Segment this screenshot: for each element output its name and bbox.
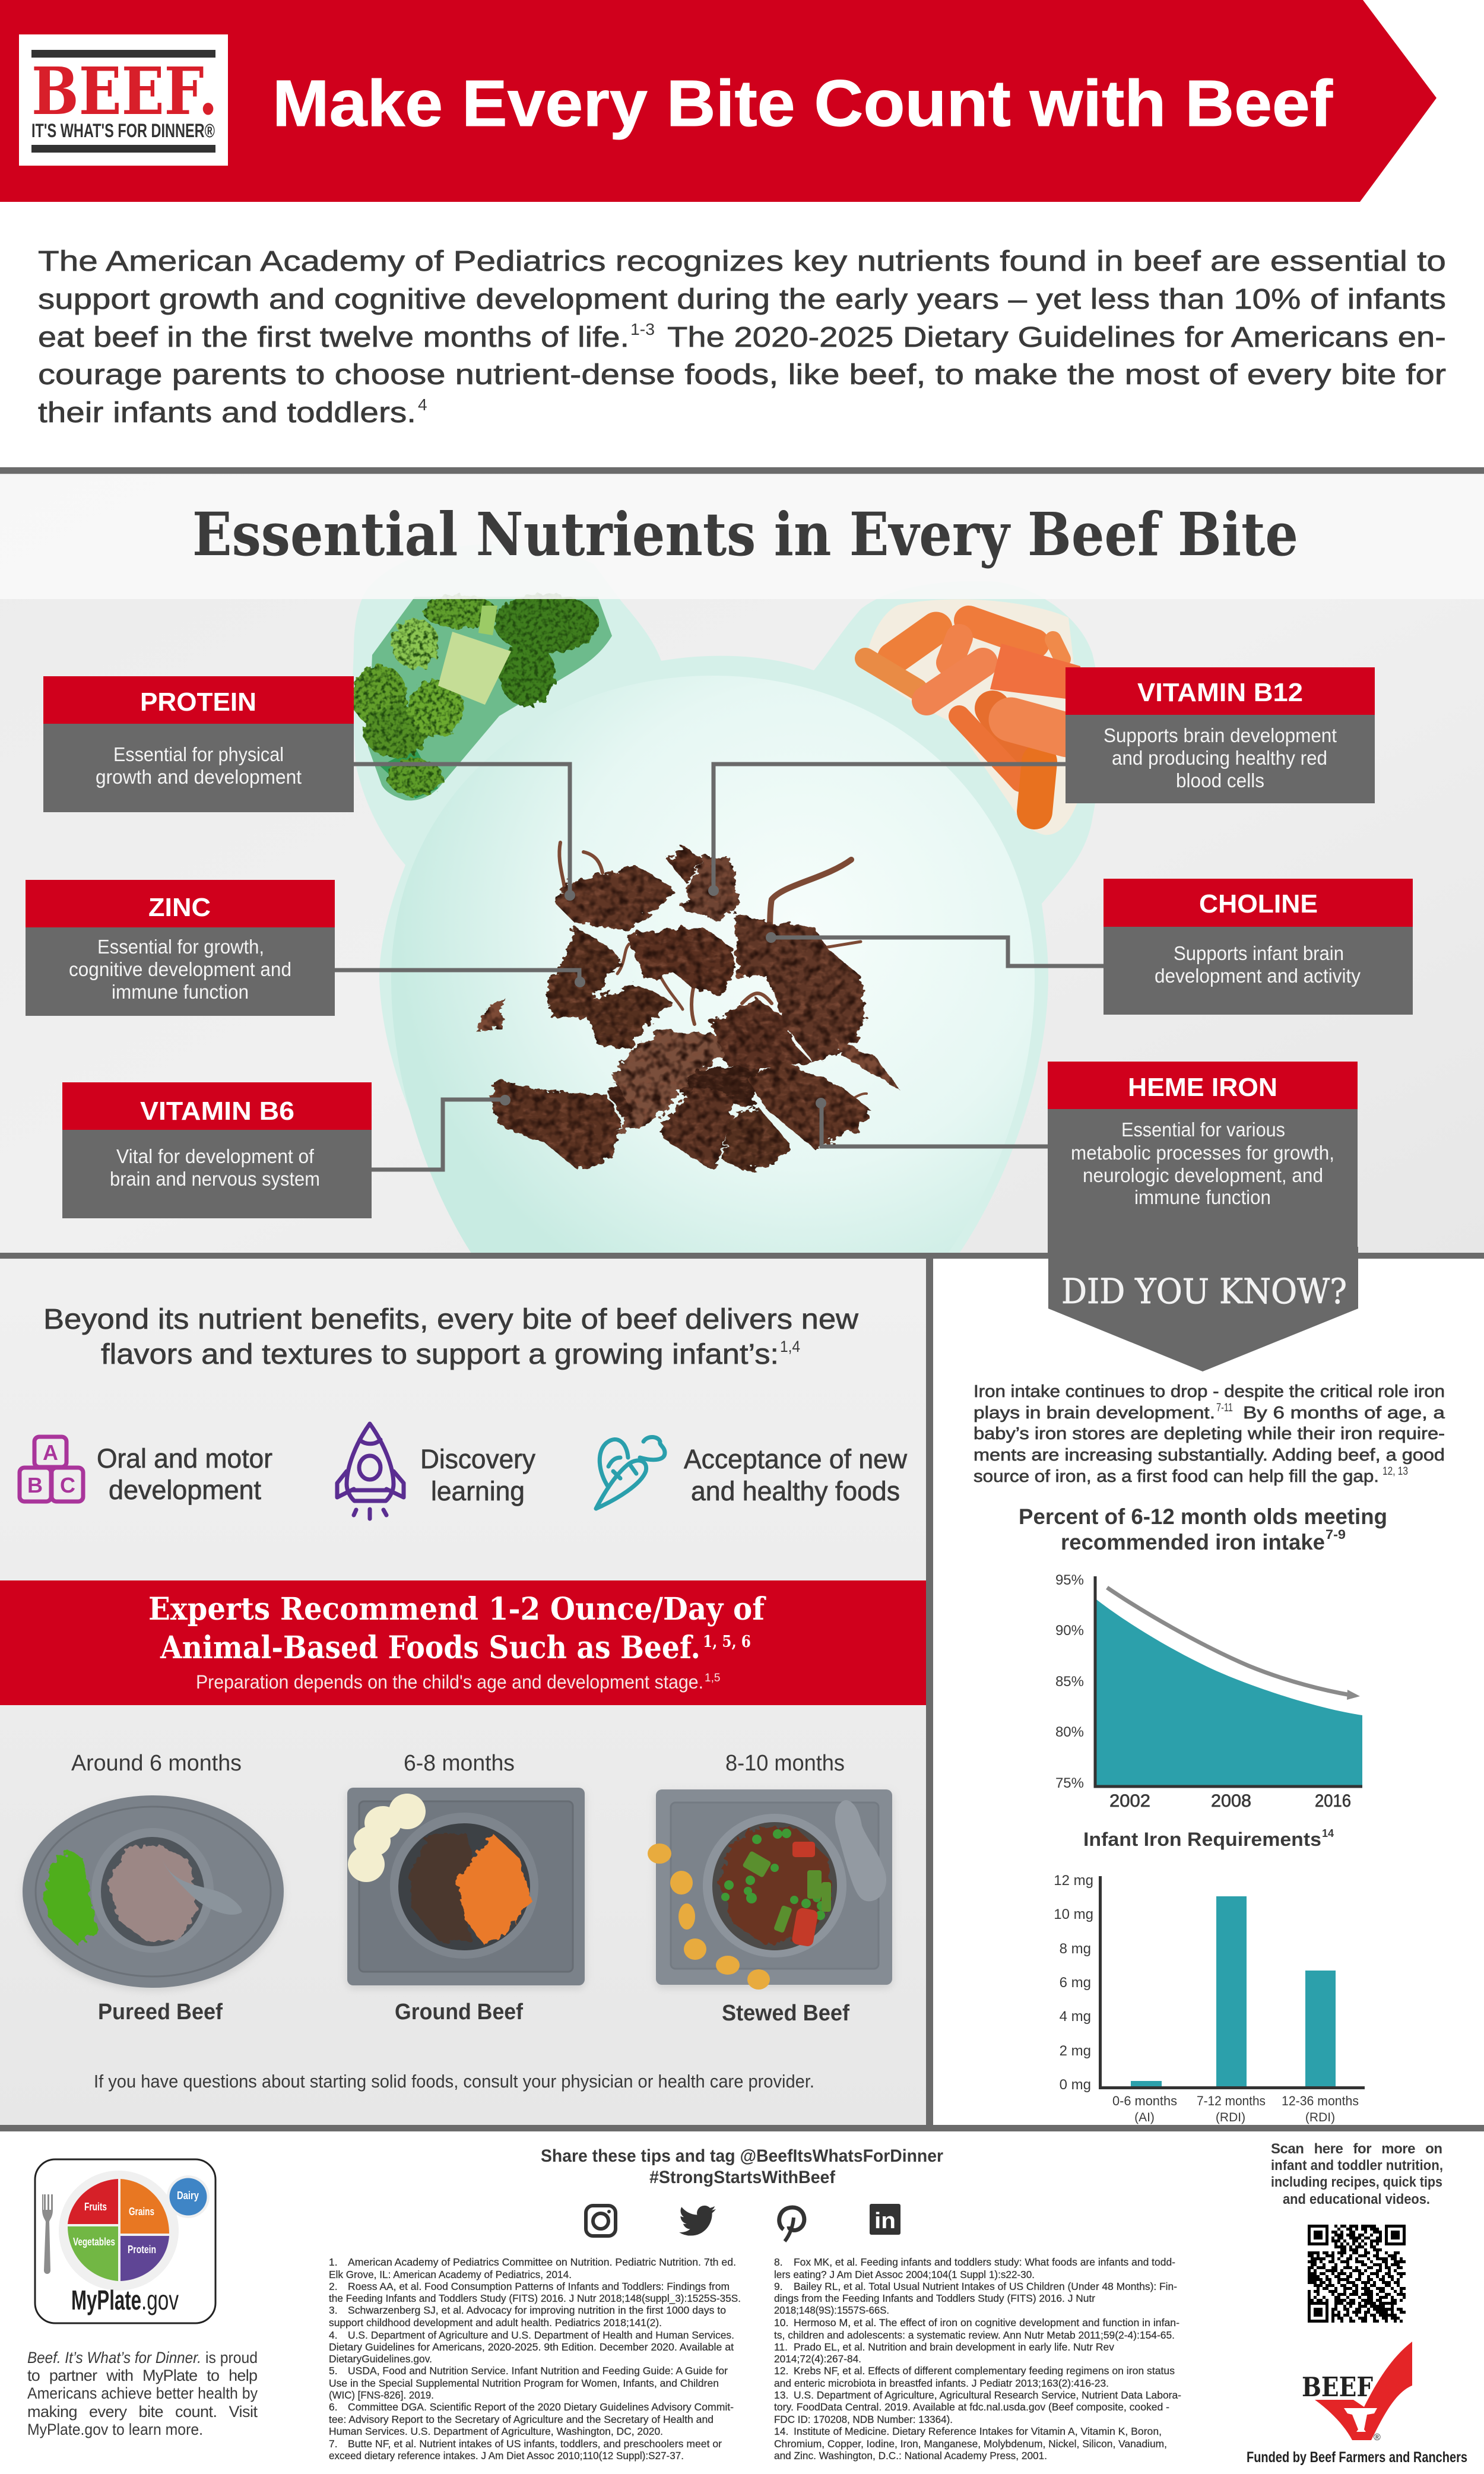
callout: protein: Essential for physical: [113, 743, 284, 765]
text: discovery learning: learning: [431, 1476, 525, 1506]
references: column 1: support childhood development and adult health. Pediatrics 2018;141(2).: [329, 2317, 662, 2329]
qr code: [1308, 2225, 1406, 2323]
references: column 2: dings from the Feeding Infants and Toddlers Study (FITS) 2016. J Nutr: [774, 2292, 1095, 2304]
chart: infant iron requirements bars: 0-6 months: [1112, 2093, 1177, 2108]
references: column 2: 9.: [774, 2280, 783, 2292]
preparation labels: Pureed Beef: [98, 2000, 223, 2025]
banner: did you know: DID YOU KNOW?: [1061, 1271, 1347, 1312]
arrow: downward trend: [1107, 1588, 1360, 1700]
callout: vitamin b6: Vital for development of: [116, 1145, 315, 1167]
intro paragraph: eat beef in the first twelve months of life.: [38, 322, 629, 353]
references: column 2: U.S. Department of Agriculture, Agricultural Research Service, Nutrient Data Labora-: [794, 2389, 1181, 2401]
references: column 2: Prado EL, et al. Nutrition and brain development in early life. Nutr Rev: [794, 2341, 1114, 2353]
references: column 1: Use in the Special Supplemental Nutrition Program for Women, Infants, and Children: [329, 2377, 719, 2389]
chart: infant iron requirements bars: 12-36 months: [1282, 2093, 1359, 2108]
chart: infant iron requirements bars: 0 mg: [1060, 2077, 1091, 2093]
references: column 1: 6.: [329, 2401, 338, 2413]
text: scan here: and educational videos.: [1283, 2191, 1430, 2207]
chart: infant iron requirements bars: (AI): [1134, 2111, 1155, 2124]
text: myplate partnership: Americans achieve better health by: [27, 2384, 258, 2402]
heading: infant iron requirements: Infant Iron Requirements: [1083, 1829, 1321, 1850]
banner: experts recommend: Experts Recommend 1-2 Ounce/Day of: [148, 1591, 766, 1627]
references: column 2: ts, children and adolescents: a systematic review. Ann Nutr Metab 2011;59(2-4):154-65.: [774, 2329, 1175, 2341]
logo: myplate: Dairy: [177, 2190, 199, 2201]
logo: Beef. It's What's for Dinner: BEEF.: [31, 53, 218, 129]
references: column 1: 7.: [329, 2438, 338, 2450]
references: column 2: Institute of Medicine. Dietary Reference Intakes for Vitamin A, Vitamin K, Boron,: [794, 2425, 1162, 2437]
chart: iron intake area chart: 2016: [1315, 1791, 1351, 1811]
logo: Beef. It's What's for Dinner: IT'S WHAT'S FOR DINNER®: [31, 120, 215, 141]
references: column 1: Human Services. U.S. Department of Agriculture, Washington, DC, 2020.: [329, 2425, 663, 2437]
photo: pureed beef plate: [23, 1795, 284, 1990]
text: myplate partnership: MyPlate.gov to learn more.: [27, 2421, 203, 2438]
chart: iron intake area chart: 90%: [1055, 1623, 1084, 1639]
preparation labels: Ground Beef: [395, 2000, 523, 2025]
text: iron intake paragraph: 12, 13: [1382, 1465, 1408, 1478]
callout: heme iron: neurologic development, and: [1083, 1164, 1323, 1186]
references: column 1: DietaryGuidelines.gov.: [329, 2353, 432, 2365]
references: column 1: Schwarzenberg SJ, et al. Advocacy for improving nutrition in the first 1000 days to: [348, 2304, 726, 2316]
text: beyond nutrient benefits: [43, 1304, 858, 1370]
callout: vitamin b6: brain and nervous system: [110, 1168, 320, 1190]
references: column 2: 10.: [774, 2317, 788, 2329]
photo: baby plate: [351, 544, 1101, 1259]
references: column 2: tory. FoodData Central. 2019. Available at fdc.nal.usda.gov (Beef composite, cooked -: [774, 2401, 1169, 2413]
text: myplate partnership: Beef. It’s What’s for Dinner.: [27, 2349, 201, 2367]
chart: infant iron requirements bars: 6 mg: [1060, 1975, 1091, 1991]
text: iron intake paragraph: 7-11: [1216, 1402, 1233, 1414]
chart: iron intake area chart: 2008: [1211, 1791, 1251, 1811]
references: column 1: 2.: [329, 2280, 338, 2292]
connector lines: [335, 764, 1104, 1170]
references: column 2: 12.: [774, 2365, 788, 2377]
logo: myplate: [35, 2159, 215, 2323]
text: discovery learning: Discovery: [420, 1444, 535, 1474]
logo: myplate: Fruits: [84, 2201, 107, 2213]
text: iron intake paragraph: By 6 months of age, a: [1243, 1404, 1445, 1423]
age labels: Around 6 months: [71, 1751, 242, 1776]
chart: infant iron requirements bars: 4 mg: [1060, 2009, 1091, 2025]
text: iron intake paragraph: Iron intake continues to drop - despite the critical role iron: [974, 1382, 1445, 1401]
icon: linkedin: [870, 2204, 900, 2235]
photo: stewed beef tray: [648, 1789, 892, 1990]
preparation labels: [98, 2000, 849, 2026]
text: myplate partnership: making every bite count. Visit: [27, 2403, 258, 2421]
heading: essential nutrients: Essential Nutrients in Every Beef Bite: [192, 499, 1298, 569]
logo: myplate: .gov: [141, 2285, 179, 2315]
references: column 1: tee: Advisory Report to the Secretary of Agriculture and the Secretary of Health and: [329, 2413, 714, 2425]
chart: infant iron requirements bars: (RDI): [1305, 2111, 1335, 2124]
chart: iron intake area chart: [1055, 1572, 1362, 1811]
text: iron intake paragraph: plays in brain development.: [974, 1404, 1215, 1423]
text: iron intake paragraph: baby’s iron stores are depleting while their iron require-: [974, 1424, 1445, 1443]
green bowl with broccoli: [351, 594, 612, 800]
text: iron intake paragraph: source of iron, as a first food can help fill the gap.: [974, 1467, 1379, 1486]
callout: choline: CHOLINE: [1199, 889, 1318, 918]
logo: beef check: BEEF: [1302, 2371, 1373, 2403]
age labels: 6-8 months: [404, 1751, 515, 1776]
heading: infant iron requirements: 14: [1322, 1827, 1334, 1839]
references: column 1: U.S. Department of Agriculture and U.S. Department of Health and Human Services.: [348, 2329, 734, 2341]
intro paragraph: their infants and toddlers.: [38, 397, 416, 429]
intro paragraph: support growth and cognitive development during the early years – yet less than 10% of infants: [38, 284, 1446, 315]
banner: experts recommend: Preparation depends on the child's age and development stage.: [196, 1671, 703, 1693]
references: column 1: 1.: [329, 2256, 338, 2268]
text: iron intake paragraph: [974, 1382, 1445, 1486]
references: column 2: Fox MK, et al. Feeding infants and toddlers study: What foods are infants and todd-: [794, 2256, 1175, 2268]
references: column 2: and enteric microbiota in breastfed infants. J Pediatr 2013;163(2):416-23.: [774, 2377, 1109, 2389]
banner: did you know: [1048, 1247, 1358, 1371]
callout: protein: PROTEIN: [140, 688, 256, 717]
references: column 1: [329, 2256, 741, 2462]
callout: heme iron: Essential for various: [1121, 1119, 1285, 1141]
chart: infant iron requirements bars: 7-12 months: [1197, 2093, 1266, 2108]
text: iron intake paragraph: ments are increasing substantially. Adding beef, a good: [974, 1446, 1445, 1465]
callout: vitamin b6: VITAMIN B6: [140, 1097, 294, 1126]
icon: pinterest: [779, 2207, 804, 2241]
text: acceptance of new and healthy foods: Acceptance of new: [684, 1444, 907, 1474]
text: myplate partnership: to partner with MyPlate to help: [27, 2367, 258, 2384]
text: beyond nutrient benefits: Beyond its nutrient benefits, every bite of beef delivers new: [43, 1304, 858, 1335]
callout: zinc: [26, 880, 335, 1016]
references: column 2: Chromium, Copper, Iodine, Iron, Manganese, Molybdenum, Nickel, Silicon, Vanadium,: [774, 2438, 1167, 2450]
callout: vitamin b12: [1066, 667, 1375, 803]
panel: essential nutrients: [0, 474, 1484, 1259]
references: column 1: 4.: [329, 2329, 338, 2341]
text: scan here: including recipes, quick tips: [1271, 2174, 1442, 2190]
callout: choline: development and activity: [1155, 965, 1361, 987]
preparation labels: Stewed Beef: [722, 2001, 849, 2026]
references: column 1: Dietary Guidelines for Americans, 2020-2025. 9th Edition. December 2020. Available at: [329, 2341, 734, 2353]
banner: experts recommend: [0, 1580, 926, 1705]
chart: iron intake area chart: 80%: [1055, 1724, 1084, 1740]
icon: abc blocks: A: [43, 1440, 58, 1465]
logo: beef check: ®: [1374, 2432, 1381, 2443]
icon: abc blocks: [20, 1437, 83, 1501]
text: oral and motor development: [97, 1443, 272, 1505]
references: column 1: American Academy of Pediatrics Committee on Nutrition. Pediatric Nutrition. 7th ed.: [348, 2256, 736, 2268]
callout: vitamin b12: VITAMIN B12: [1137, 678, 1303, 707]
logo: myplate: Protein: [128, 2244, 156, 2256]
text: acceptance of new and healthy foods: and healthy foods: [691, 1476, 900, 1506]
banner: experts recommend: 1, 5, 6: [703, 1633, 751, 1651]
text: share these tips: Share these tips and tag @BeefItsWhatsForDinner: [541, 2146, 943, 2166]
text: discovery learning: [420, 1444, 535, 1506]
references: column 1: Elk Grove, IL: American Academy of Pediatrics, 2014.: [329, 2269, 572, 2280]
references: column 2: 11.: [774, 2341, 788, 2353]
title: Make Every Bite Count with Beef: [272, 67, 1333, 140]
callout: zinc: cognitive development and: [69, 958, 291, 980]
references: column 1: USDA, Food and Nutrition Service. Infant Nutrition and Feeding Guide: A Guide for: [348, 2365, 728, 2377]
chart: infant iron requirements bars: 10 mg: [1054, 1906, 1093, 1922]
callout: heme iron: HEME IRON: [1128, 1073, 1277, 1102]
text: share these tips: #StrongStartsWithBeef: [649, 2168, 836, 2187]
icon: abc blocks: C: [60, 1473, 75, 1497]
heading: percent meeting iron intake: Percent of 6-12 month olds meeting: [1019, 1504, 1387, 1529]
panel: beyond nutrients: [0, 1259, 926, 2125]
callout: protein: growth and development: [96, 766, 302, 788]
callout: choline: Supports infant brain: [1174, 942, 1344, 964]
icon: linkedin: in: [874, 2209, 896, 2234]
header banner: [0, 0, 1437, 202]
chart: iron intake area chart: 85%: [1055, 1674, 1084, 1690]
heading: percent meeting iron intake: recommended iron intake: [1061, 1530, 1325, 1554]
icon: instagram: [586, 2206, 616, 2236]
references: column 2: Hermoso M, et al. The effect of iron on cognitive development and function in infan-: [794, 2317, 1179, 2329]
callout: vitamin b6: [62, 1082, 372, 1218]
references: column 2: 2018;148(9S):1557S-66S.: [774, 2304, 889, 2316]
callout: protein: [43, 676, 354, 812]
callout: heme iron: [1048, 1062, 1358, 1255]
chart: iron intake area chart: 75%: [1055, 1775, 1084, 1791]
age labels: [71, 1751, 845, 1776]
callout: zinc: immune function: [112, 981, 249, 1003]
banner: experts recommend: 1,5: [705, 1672, 720, 1684]
text: scan here: Scan here for more on: [1271, 2141, 1442, 2157]
references: column 2: Krebs NF, et al. Effects of different complementary feeding regimens on iron status: [794, 2365, 1175, 2377]
references: column 1: the Feeding Infants and Toddlers Study (FITS) 2016. J Nutr 2018;148(suppl_3):1525S-35S.: [329, 2292, 741, 2305]
references: column 1: Committee DGA. Scientific Report of the 2020 Dietary Guidelines Advisory Commit-: [348, 2401, 734, 2413]
callout: vitamin b12: Supports brain development: [1104, 724, 1337, 746]
intro paragraph: The 2020-2025 Dietary Guidelines for Americans en-: [667, 322, 1446, 353]
heading: percent meeting iron intake: [1019, 1504, 1387, 1554]
references: column 2: Bailey RL, et al. Total Usual Nutrient Intakes of US Children (Under 48 Months): Fin-: [794, 2280, 1177, 2292]
chart: iron intake area chart: 95%: [1055, 1572, 1084, 1588]
text: myplate partnership: [27, 2349, 258, 2438]
logo: myplate: Grains: [129, 2206, 154, 2218]
heading: percent meeting iron intake: 7-9: [1326, 1527, 1346, 1542]
references: column 1: (WIC) [FNS-826]. 2019.: [329, 2389, 434, 2401]
text: oral and motor development: Oral and motor: [97, 1443, 272, 1474]
icon: rocket: [337, 1424, 404, 1519]
references: column 1: Butte NF, et al. Nutrient intakes of US infants, toddlers, and preschoolers meet or: [348, 2438, 722, 2450]
text: beyond nutrient benefits: 1,4: [780, 1338, 800, 1355]
references: column 2: 2014;72(4):267-84.: [774, 2353, 861, 2365]
photo: ground beef tray: [347, 1788, 585, 1988]
note: consult physician: If you have questions about starting solid foods, consult your physician or health care provider.: [94, 2071, 814, 2092]
text: acceptance of new and healthy foods: [684, 1444, 907, 1506]
intro paragraph: courage parents to choose nutrient-dense foods, like beef, to make the most of every bite for: [38, 359, 1446, 391]
chart: infant iron requirements bars: 12 mg: [1054, 1873, 1093, 1889]
banner: experts recommend: Animal-Based Foods Such as Beef.: [160, 1630, 700, 1666]
logo: beef check: [1302, 2342, 1412, 2443]
carrot bowl: [865, 599, 1086, 835]
references: column 1: 5.: [329, 2365, 338, 2377]
age labels: 8-10 months: [725, 1751, 845, 1776]
intro paragraph: [38, 246, 1446, 429]
chart: iron intake area chart: 2002: [1109, 1791, 1150, 1811]
icon: carrot and broccoli: [596, 1437, 665, 1509]
callout: heme iron: immune function: [1134, 1186, 1271, 1208]
references: column 2: [774, 2256, 1181, 2462]
text: oral and motor development: development: [109, 1475, 261, 1505]
callout: heme iron: metabolic processes for growth,: [1071, 1142, 1334, 1164]
references: column 2: 13.: [774, 2389, 788, 2401]
chart: infant iron requirements bars: 2 mg: [1060, 2043, 1091, 2059]
callout: vitamin b12: and producing healthy red: [1112, 747, 1327, 769]
intro paragraph: The American Academy of Pediatrics recognizes key nutrients found in beef are essential to: [38, 246, 1446, 277]
icon: twitter: [679, 2206, 716, 2236]
logo: Beef. It's What's for Dinner: [19, 34, 228, 166]
references: column 1: 3.: [329, 2304, 338, 2316]
intro paragraph: 1-3: [630, 320, 655, 338]
text: share these tips: [541, 2146, 943, 2187]
chart: infant iron requirements bars: (RDI): [1216, 2111, 1245, 2124]
chart: infant iron requirements bars: 8 mg: [1060, 1941, 1091, 1957]
logo: myplate: Vegetables: [73, 2236, 115, 2248]
callout: zinc: Essential for growth,: [97, 936, 264, 958]
callout: zinc: ZINC: [148, 893, 211, 922]
icon: abc blocks: B: [27, 1473, 43, 1497]
intro paragraph: 4: [418, 395, 427, 414]
references: column 2: lers eating? J Am Diet Assoc 2004;104(1 Suppl 1):s22-30.: [774, 2269, 1035, 2280]
callout: vitamin b12: blood cells: [1176, 769, 1264, 791]
chart: infant iron requirements bars: [1054, 1873, 1365, 2124]
text: beyond nutrient benefits: flavors and textures to support a growing infant’s:: [101, 1339, 779, 1370]
references: column 1: Roess AA, et al. Food Consumption Patterns of Infants and Toddlers: Findings from: [348, 2280, 730, 2292]
references: column 2: FDC ID: 170208, NDB Number: 13364).: [774, 2413, 953, 2425]
references: column 2: 14.: [774, 2425, 788, 2437]
logo: myplate: MyPlate: [71, 2285, 141, 2315]
text: scan here: infant and toddler nutrition,: [1271, 2158, 1443, 2174]
callout: choline: [1104, 879, 1413, 1015]
text: myplate partnership: is proud: [205, 2349, 258, 2367]
references: column 1: exceed dietary reference intakes. J Am Diet Assoc 2010;110(12 Suppl):S27-37.: [329, 2450, 684, 2462]
references: column 2: 8.: [774, 2256, 783, 2268]
text: scan here: [1271, 2141, 1443, 2207]
shredded beef: [478, 842, 900, 1171]
references: column 2: and Zinc. Washington, D.C.: National Academy Press, 2001.: [774, 2450, 1047, 2462]
